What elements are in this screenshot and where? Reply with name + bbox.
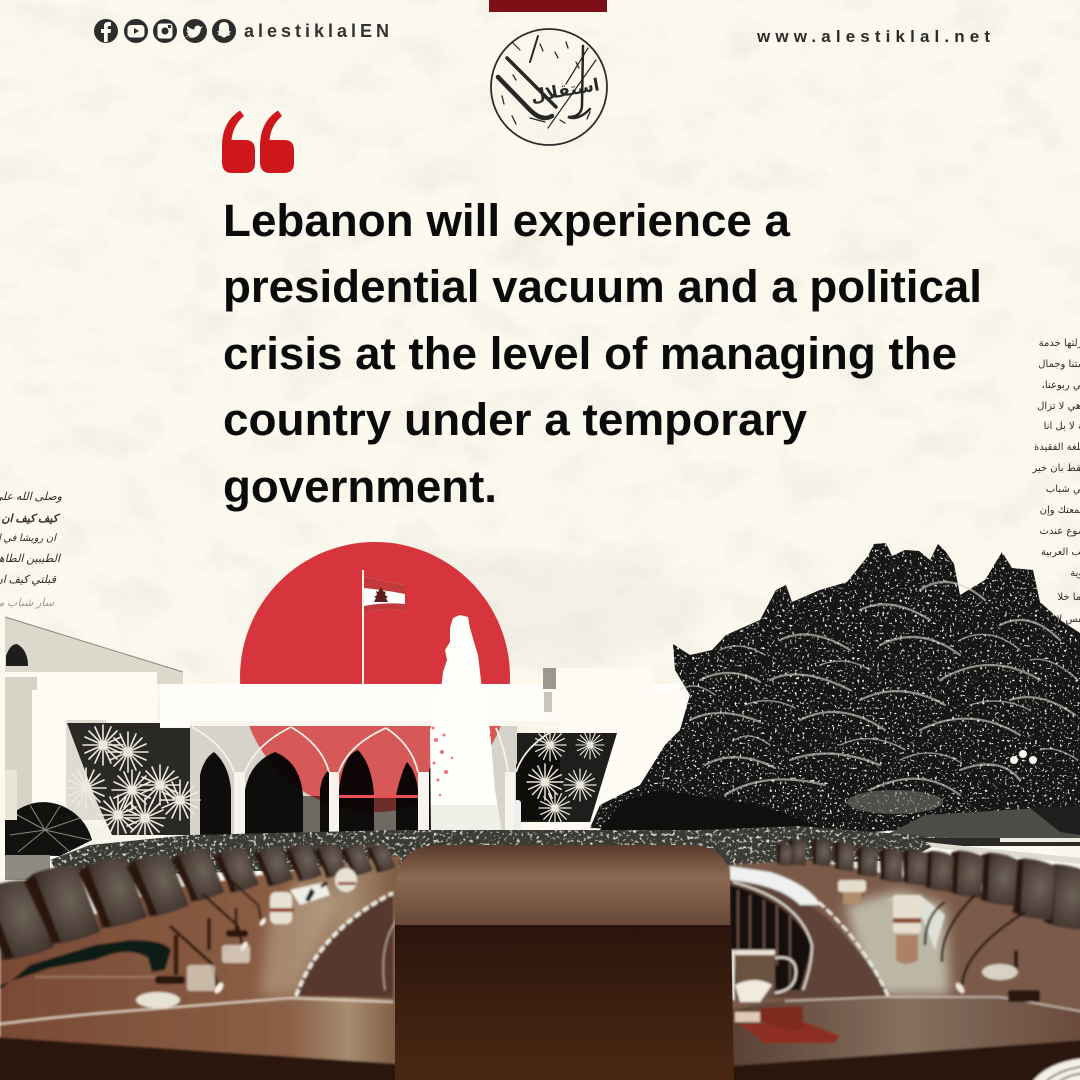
table highlight xyxy=(0,998,393,1024)
flag xyxy=(362,570,405,687)
quote text: presidential vacuum and a political xyxy=(223,261,982,312)
icon: snapchat xyxy=(212,19,236,43)
pale table glare xyxy=(260,880,340,996)
arches edge lines xyxy=(192,727,558,772)
arch openings xyxy=(200,735,560,835)
columns xyxy=(234,772,515,837)
icon: twitter xyxy=(183,19,207,43)
social media handles xyxy=(94,19,389,43)
quote text: Lebanon will experience a xyxy=(223,195,791,246)
fountain water xyxy=(430,615,521,840)
arcade ceiling xyxy=(190,725,517,835)
logo: calligraphy roundel: استقلال xyxy=(529,75,601,107)
right white wall xyxy=(543,668,653,698)
icon: instagram xyxy=(153,19,177,43)
left wall xyxy=(5,672,157,722)
dark recess right xyxy=(505,733,617,822)
left foreground palm xyxy=(5,770,92,856)
red sun circle xyxy=(240,542,510,812)
small arch window xyxy=(6,644,28,666)
cedar tree xyxy=(590,543,1080,838)
quote text: government. xyxy=(223,461,497,512)
left inner well xyxy=(296,893,393,998)
left table front xyxy=(0,1037,400,1080)
hedge xyxy=(50,826,950,878)
website: www.alestiklal.net xyxy=(756,27,990,46)
garden palms xyxy=(66,725,604,838)
mic tips and stands right xyxy=(838,880,1040,1002)
dark base xyxy=(600,790,830,830)
microphones left xyxy=(170,878,267,995)
quotation mark xyxy=(222,110,294,173)
red lit crossbar xyxy=(339,795,418,798)
cedar boughs xyxy=(680,582,1078,795)
left rear chairs xyxy=(0,842,396,964)
icon: youtube xyxy=(124,19,148,43)
right inner brown panel xyxy=(725,868,890,998)
red sun tint over arcade xyxy=(249,726,501,812)
plate corner xyxy=(1030,1058,1080,1080)
lawn xyxy=(880,808,1080,838)
handle text: alestiklalEN xyxy=(244,21,389,41)
microphones right xyxy=(925,895,1025,985)
lower shrub highlight xyxy=(847,790,943,814)
red notepad xyxy=(735,1006,840,1043)
conference table xyxy=(0,838,1080,1080)
quote text: country under a temporary xyxy=(223,394,807,445)
main white band xyxy=(160,684,685,726)
left page edge xyxy=(0,610,5,878)
vault pier shadows xyxy=(303,796,396,835)
dark reflection left xyxy=(0,940,171,990)
glasses and papers left xyxy=(136,868,357,1008)
right table front xyxy=(730,1040,1080,1080)
small white and black glints xyxy=(290,882,330,905)
palace building xyxy=(5,617,685,837)
foreground chair back xyxy=(395,845,734,1080)
silver rim xyxy=(730,866,820,905)
logo: calligraphy roundel xyxy=(491,29,607,145)
slanted roof xyxy=(5,617,183,684)
left table surface xyxy=(0,855,400,1075)
icon: facebook xyxy=(94,19,118,43)
Arabic manuscript right xyxy=(1031,338,1080,625)
right table back xyxy=(725,860,1080,1075)
lamp globes xyxy=(1010,750,1037,764)
right rear chairs xyxy=(773,838,1080,932)
right table surface xyxy=(730,996,1080,1066)
ground left xyxy=(5,855,50,880)
Arabic manuscript left xyxy=(0,491,62,609)
dark recess left xyxy=(67,723,195,835)
driveway right xyxy=(915,838,1080,864)
jug xyxy=(733,950,796,1002)
right well, pale glare xyxy=(845,890,950,995)
quote text: crisis at the level of managing the xyxy=(223,328,957,379)
top red tab xyxy=(489,0,607,12)
quote text xyxy=(223,195,982,512)
dark slats xyxy=(730,882,812,990)
